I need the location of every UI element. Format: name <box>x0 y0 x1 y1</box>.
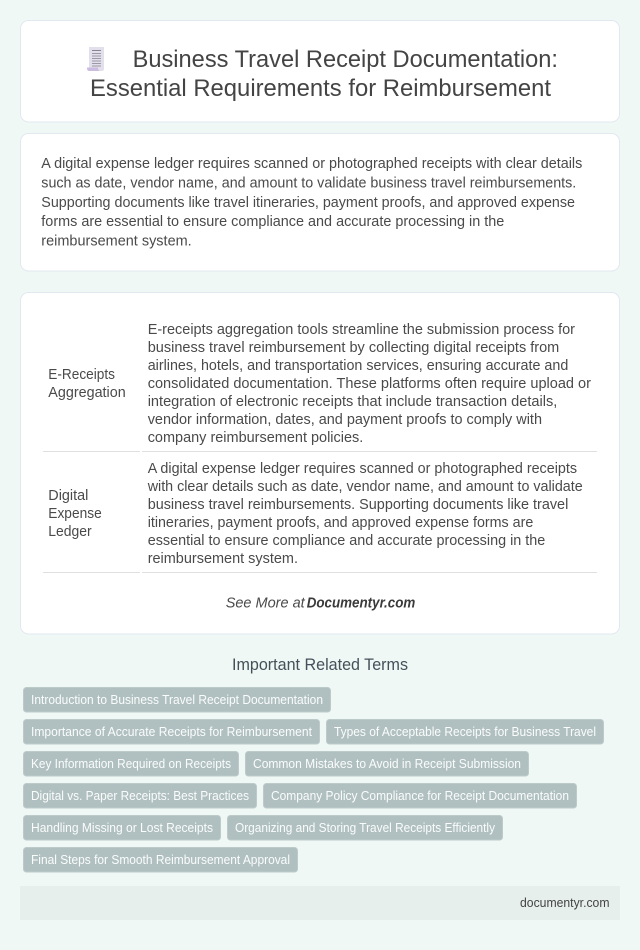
text block: introduction: reimbursement system. <box>41 233 192 249</box>
description: digital expense ledger: business travel reimbursements. Supporting documents like travel <box>148 497 568 513</box>
panel: related term tags <box>24 688 604 872</box>
tag <box>24 784 256 808</box>
description: e-receipts aggregation: airlines, hotels, and transportation services, ensuring accurate and <box>148 358 568 374</box>
tag: Company Policy Compliance for Receipt Documentation <box>271 788 569 803</box>
footer: documentyr.com <box>520 895 610 910</box>
description: digital expense ledger: itineraries, payment proofs, and approved expense forms are <box>148 515 533 531</box>
title: Business Travel Receipt Documentation: <box>133 46 558 73</box>
label: e-receipts aggregation: E-Receipts <box>48 367 115 383</box>
tag: Digital vs. Paper Receipts: Best Practices <box>31 788 249 803</box>
panel: introduction <box>20 134 620 271</box>
text block: introduction: forms are essential to ensure compliance and accurate processing in the <box>41 214 504 230</box>
tag <box>24 688 330 712</box>
description: digital expense ledger: A digital expense ledger requires scanned or photographed receipts <box>148 461 577 477</box>
panel: comparison table <box>20 292 620 634</box>
text block: introduction <box>41 156 582 249</box>
see more link: Documentyr.com <box>307 595 415 611</box>
description: e-receipts aggregation: vendor information, dates, and payment proofs to comply with <box>148 412 542 428</box>
tag: Key Information Required on Receipts <box>31 756 231 771</box>
label: e-receipts aggregation: Aggregation <box>48 385 126 401</box>
tag: Final Steps for Smooth Reimbursement Approval <box>31 852 290 867</box>
tag <box>24 720 320 744</box>
tag: Common Mistakes to Avoid in Receipt Submission <box>253 756 521 771</box>
label: digital expense ledger: Expense <box>48 506 102 522</box>
description: e-receipts aggregation: consolidated documentation. These platforms often require upload or <box>148 376 591 392</box>
see more link: See More at <box>226 595 306 611</box>
text block: introduction: such as date, vendor name, and amount to validate business travel reimbursements. <box>41 175 576 191</box>
tag <box>326 720 604 744</box>
tag: Importance of Accurate Receipts for Reimbursement <box>31 724 312 739</box>
see more link <box>226 595 415 611</box>
label: digital expense ledger: Ledger <box>48 524 92 540</box>
footer <box>20 886 620 920</box>
description: e-receipts aggregation <box>148 322 591 446</box>
description: e-receipts aggregation: company reimbursement policies. <box>148 430 363 446</box>
text block: introduction: Supporting documents like travel itineraries, payment proofs, and approved expense <box>41 195 575 211</box>
tag: Handling Missing or Lost Receipts <box>31 820 213 835</box>
description: digital expense ledger: essential to ensure compliance and accurate processing in the <box>148 533 545 549</box>
description: digital expense ledger: with clear details such as date, vendor name, and amount to validate <box>147 479 583 495</box>
panel: title card <box>20 20 620 122</box>
label: digital expense ledger <box>48 488 102 540</box>
title: Essential Requirements for Reimbursement <box>90 75 551 102</box>
icon: receipt <box>87 47 104 71</box>
tag <box>228 816 502 840</box>
tag: Types of Acceptable Receipts for Business Travel <box>334 724 596 739</box>
description: e-receipts aggregation: E-receipts aggregation tools streamline the submission process for <box>148 322 575 338</box>
label: e-receipts aggregation <box>48 367 126 401</box>
tag <box>24 848 298 872</box>
row: e-receipts aggregation <box>48 322 591 446</box>
description: digital expense ledger <box>147 461 583 567</box>
title <box>90 46 558 102</box>
row: digital expense ledger <box>48 461 583 567</box>
tag <box>24 816 220 840</box>
description: digital expense ledger: reimbursement system. <box>148 551 298 567</box>
label: digital expense ledger: Digital <box>48 488 88 504</box>
heading: important related terms: Important Related Terms <box>232 656 408 674</box>
tag: Introduction to Business Travel Receipt Documentation <box>31 692 323 707</box>
tag <box>264 784 576 808</box>
description: e-receipts aggregation: business travel reimbursement by collecting digital receipts from <box>148 340 559 356</box>
description: e-receipts aggregation: integration of electronic receipts that include transaction details, <box>148 394 557 410</box>
tag <box>24 752 238 776</box>
tag <box>246 752 528 776</box>
text block: introduction: A digital expense ledger requires scanned or photographed receipts with clear details <box>41 156 582 172</box>
tag: Organizing and Storing Travel Receipts Efficiently <box>235 820 495 835</box>
